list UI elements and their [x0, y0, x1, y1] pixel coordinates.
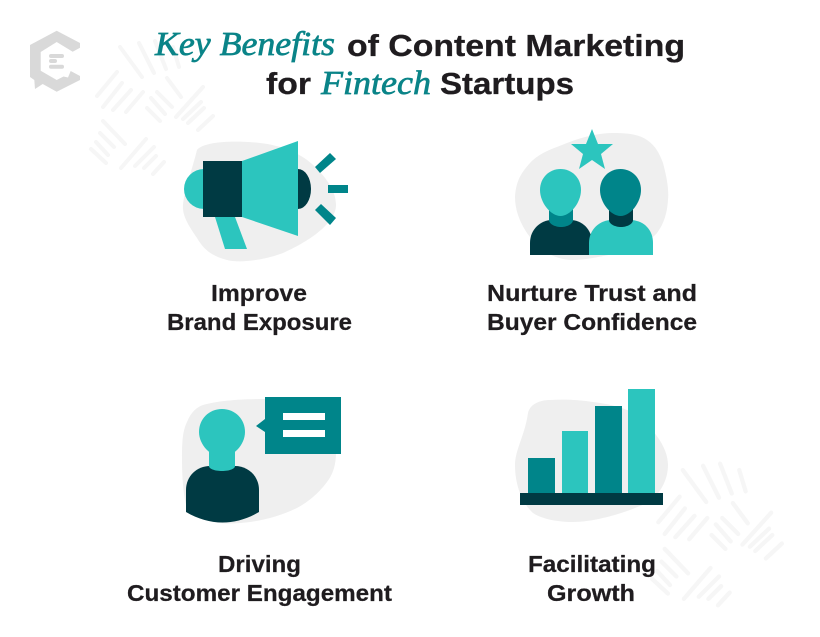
icon: person with speech bubble — [182, 397, 341, 524]
label: Improve — [211, 280, 307, 306]
panel: facilitating growth — [515, 389, 668, 606]
label — [528, 551, 656, 606]
title: for — [266, 66, 311, 101]
panel: improve brand exposure — [167, 141, 352, 335]
label — [127, 551, 392, 606]
label: Nurture Trust and — [487, 280, 697, 306]
label: Facilitating — [528, 551, 656, 577]
icon: megaphone — [183, 141, 348, 261]
label — [167, 280, 352, 335]
title — [154, 26, 685, 102]
icon: bar chart — [515, 389, 668, 522]
title: Startups — [440, 66, 574, 101]
label: Customer Engagement — [127, 580, 392, 606]
background pattern top left — [91, 41, 213, 174]
title: of Content Marketing — [347, 28, 685, 63]
label: Buyer Confidence — [487, 309, 697, 335]
label: Driving — [218, 551, 301, 577]
panel: nurture trust — [487, 129, 697, 335]
logo — [30, 31, 80, 92]
panel: driving customer engagement — [127, 397, 392, 606]
background pattern bottom right — [652, 464, 782, 605]
label: Brand Exposure — [167, 309, 352, 335]
icon: two people and star — [515, 129, 668, 260]
title: Fintech — [320, 65, 431, 102]
title: Key Benefits — [154, 26, 335, 63]
label: Growth — [547, 580, 635, 606]
label — [487, 280, 697, 335]
